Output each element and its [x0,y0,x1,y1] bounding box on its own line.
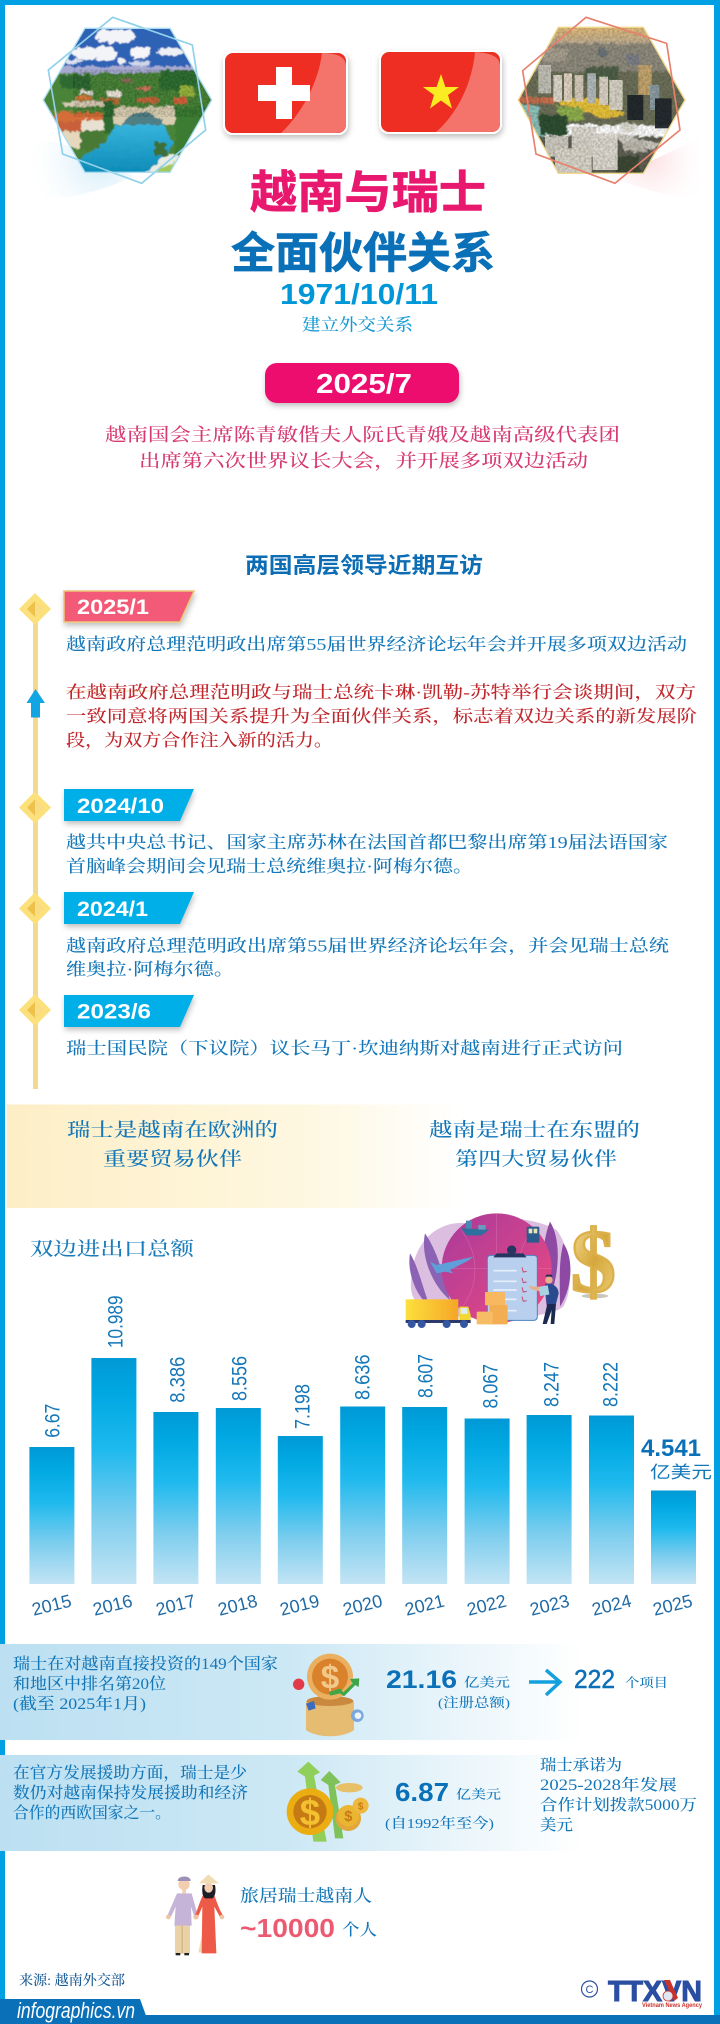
year labels: 2024 [590,1591,633,1620]
title [231,156,495,281]
illustration: logistics and dollar: $ [571,1213,616,1312]
arrow: to project count [529,1670,560,1695]
icon: coin stack: $ [321,1660,340,1697]
flag: Vietnam [380,51,501,133]
text: delegation summary: 越南国会主席陈青敏偕夫人阮氏青娥及越南高级代表团 [105,424,620,445]
illustration: logistics and dollar [406,1213,616,1328]
stat: ODA total [385,1777,502,1832]
icon: gold coins: $ [300,1792,320,1833]
heading: recent visits: 两国高层领导近期互访 [245,548,483,580]
bar values: 8.247 [540,1362,564,1407]
date: establishment of diplomatic relations [280,279,438,334]
text: commitment 2025-2028: 美元 [540,1816,574,1834]
stat: ODA total: 亿美元 [456,1786,502,1802]
logo: TTXVN: C [586,1984,594,1996]
footer bar [0,1998,720,2024]
milestone 2024/1: 2024/1 [77,898,148,921]
milestone 2023/6: 瑞士国民院（下议院）议长马丁·坎迪纳斯对越南进行正式访问 [66,1038,623,1058]
milestone 2024/1: 越南政府总理范明政出席第55届世界经济论坛年会，并会见瑞士总统 [66,936,670,956]
flag: Switzerland [224,52,347,134]
panel: development assistance: 数仍对越南保持发展援助和经济 [13,1784,248,1802]
text: upgraded relationship: 一致同意将两国关系提升为全面伙伴关系，标志着双边关系的新发展阶 [66,707,697,726]
bar values [42,1296,622,1438]
year labels: 2018 [216,1591,259,1620]
icon: Vietnamese couple [166,1874,224,1955]
highlighted value 2025 [641,1435,712,1482]
highlighted value 2025: 亿美元 [650,1463,712,1482]
bar values: 8.556 [228,1356,252,1401]
timeline [19,591,697,1089]
year labels: 2019 [278,1591,321,1620]
stat: ODA total: (自1992年至今) [385,1815,494,1832]
stat: registered capital [386,1666,511,1710]
title: 全面伙伴关系 [231,219,495,281]
text: commitment 2025-2028: 合作计划拨款5000万 [540,1796,697,1814]
text: Vietnamese in Switzerland: 个人 [342,1921,377,1939]
stat: registered capital: 21.16 [386,1666,457,1694]
panel: development assistance: 在官方发展援助方面，瑞士是少 [13,1764,248,1782]
bar values: 6.67 [42,1404,64,1438]
text: upgraded relationship: 段，为双方合作注入新的活力。 [66,731,333,750]
bar values: 8.607 [414,1354,438,1398]
panel: trade partners: 瑞士是越南在欧洲的 [67,1118,278,1141]
text: Vietnamese in Switzerland: 旅居瑞士越南人 [240,1886,372,1906]
year labels: 2016 [91,1591,134,1620]
stat: registered capital: 亿美元 [464,1674,511,1690]
date: establishment of diplomatic relations: 建立外交关系 [302,316,413,334]
bars [29,1358,696,1584]
milestone 2023/6: 2023/6 [77,1000,151,1024]
pill: 2025/7: 2025/7 [316,368,412,399]
milestone 2023/6 [19,994,623,1058]
milestone 2024/1: 维奥拉·阿梅尔德。 [66,960,234,979]
panel: trade partners: 重要贸易伙伴 [103,1148,242,1170]
panel: trade partners [7,1104,640,1208]
milestone 2025/1: 2025/1 [77,596,149,619]
highlighted value 2025: 4.541 [641,1435,701,1462]
text: upgraded relationship: 在越南政府总理范明政与瑞士总统卡琳·凯勒-苏特举行会谈期间，双方 [66,682,696,702]
bar values: 8.636 [352,1354,374,1400]
year labels: 2021 [403,1591,446,1620]
pill: 2025/7 [265,363,459,403]
panel: trade partners: 越南是瑞士在东盟的 [429,1118,640,1141]
logo: TTXVN: TTXVN [608,1976,702,2008]
milestone 2025/1: 越南政府总理范明政出席第55届世界经济论坛年会并开展多项双边活动 [66,634,687,654]
date: establishment of diplomatic relations: 1971/10/11 [280,279,438,311]
milestone 2024/10: 首脑峰会期间会见瑞士总统维奥拉·阿梅尔德。 [66,857,473,876]
year labels: 2025 [651,1591,694,1620]
text: commitment 2025-2028: 2025-2028年发展 [540,1775,678,1794]
bar chart: bilateral trade [29,1296,712,1620]
chart heading: 双边进出口总额 [30,1238,195,1260]
panel: direct investment: (截至 2025年1月) [13,1694,146,1713]
year labels: 2020 [341,1591,384,1620]
text: delegation summary [105,424,620,472]
milestone 2024/1 [19,892,670,979]
stat: registered capital: (注册总额) [438,1695,510,1710]
text: delegation summary: 出席第六次世界议长大会，并开展多项双边活动 [139,451,588,472]
panel: development assistance: 合作的西欧国家之一。 [13,1804,171,1822]
year labels: 2023 [528,1591,571,1620]
icon: coin stack [293,1654,364,1736]
milestone 2024/10: 越共中央总书记、国家主席苏林在法国首都巴黎出席第19届法语国家 [66,833,668,852]
year labels: 2022 [465,1591,508,1620]
bar values: 10.989 [104,1296,128,1348]
year labels: 2017 [154,1591,197,1620]
panel: direct investment: 和地区中排名第20位 [13,1674,166,1693]
text: Vietnamese in Switzerland [240,1886,377,1943]
footer bar: infographics.vn [17,1998,135,2023]
year labels: 2015 [30,1591,73,1620]
bar values: 7.198 [292,1384,314,1429]
logo: TTXVN: Vietnam News Agency [642,2002,702,2009]
stat: ODA total: 6.87 [395,1777,449,1807]
bar values: 8.386 [166,1357,190,1403]
stat: projects: 222 [574,1664,615,1694]
title: 越南与瑞士 [250,156,486,221]
icon: gold coins: $ [344,1809,352,1825]
arrow: timeline up [26,689,45,718]
hexagon photo: Vietnam city [518,16,686,191]
source: 来源: 越南外交部 [19,1972,125,1989]
panel: direct investment [0,1644,668,1740]
panel: trade partners: 第四大贸易伙伴 [455,1148,617,1170]
milestone 2024/10 [19,789,668,876]
bar values: 8.067 [480,1364,502,1408]
text: commitment 2025-2028 [540,1756,697,1834]
year labels [30,1591,694,1620]
hexagon photo: Switzerland bridge [42,16,212,196]
milestone 2024/10: 2024/10 [77,795,164,818]
text: commitment 2025-2028: 瑞士承诺为 [540,1756,622,1774]
bar values: 8.222 [600,1362,622,1407]
panel: development assistance [0,1755,697,1851]
text: upgraded relationship [66,682,697,750]
text: Vietnamese in Switzerland: ~10000 [240,1913,335,1943]
panel: direct investment: 瑞士在对越南直接投资的149个国家 [13,1655,278,1673]
stat: projects: 个项目 [625,1676,668,1690]
icon: gold coins [287,1762,369,1842]
stat: projects [574,1664,668,1694]
icon: gold coins: $ [358,1801,364,1812]
milestone 2025/1 [19,591,697,750]
